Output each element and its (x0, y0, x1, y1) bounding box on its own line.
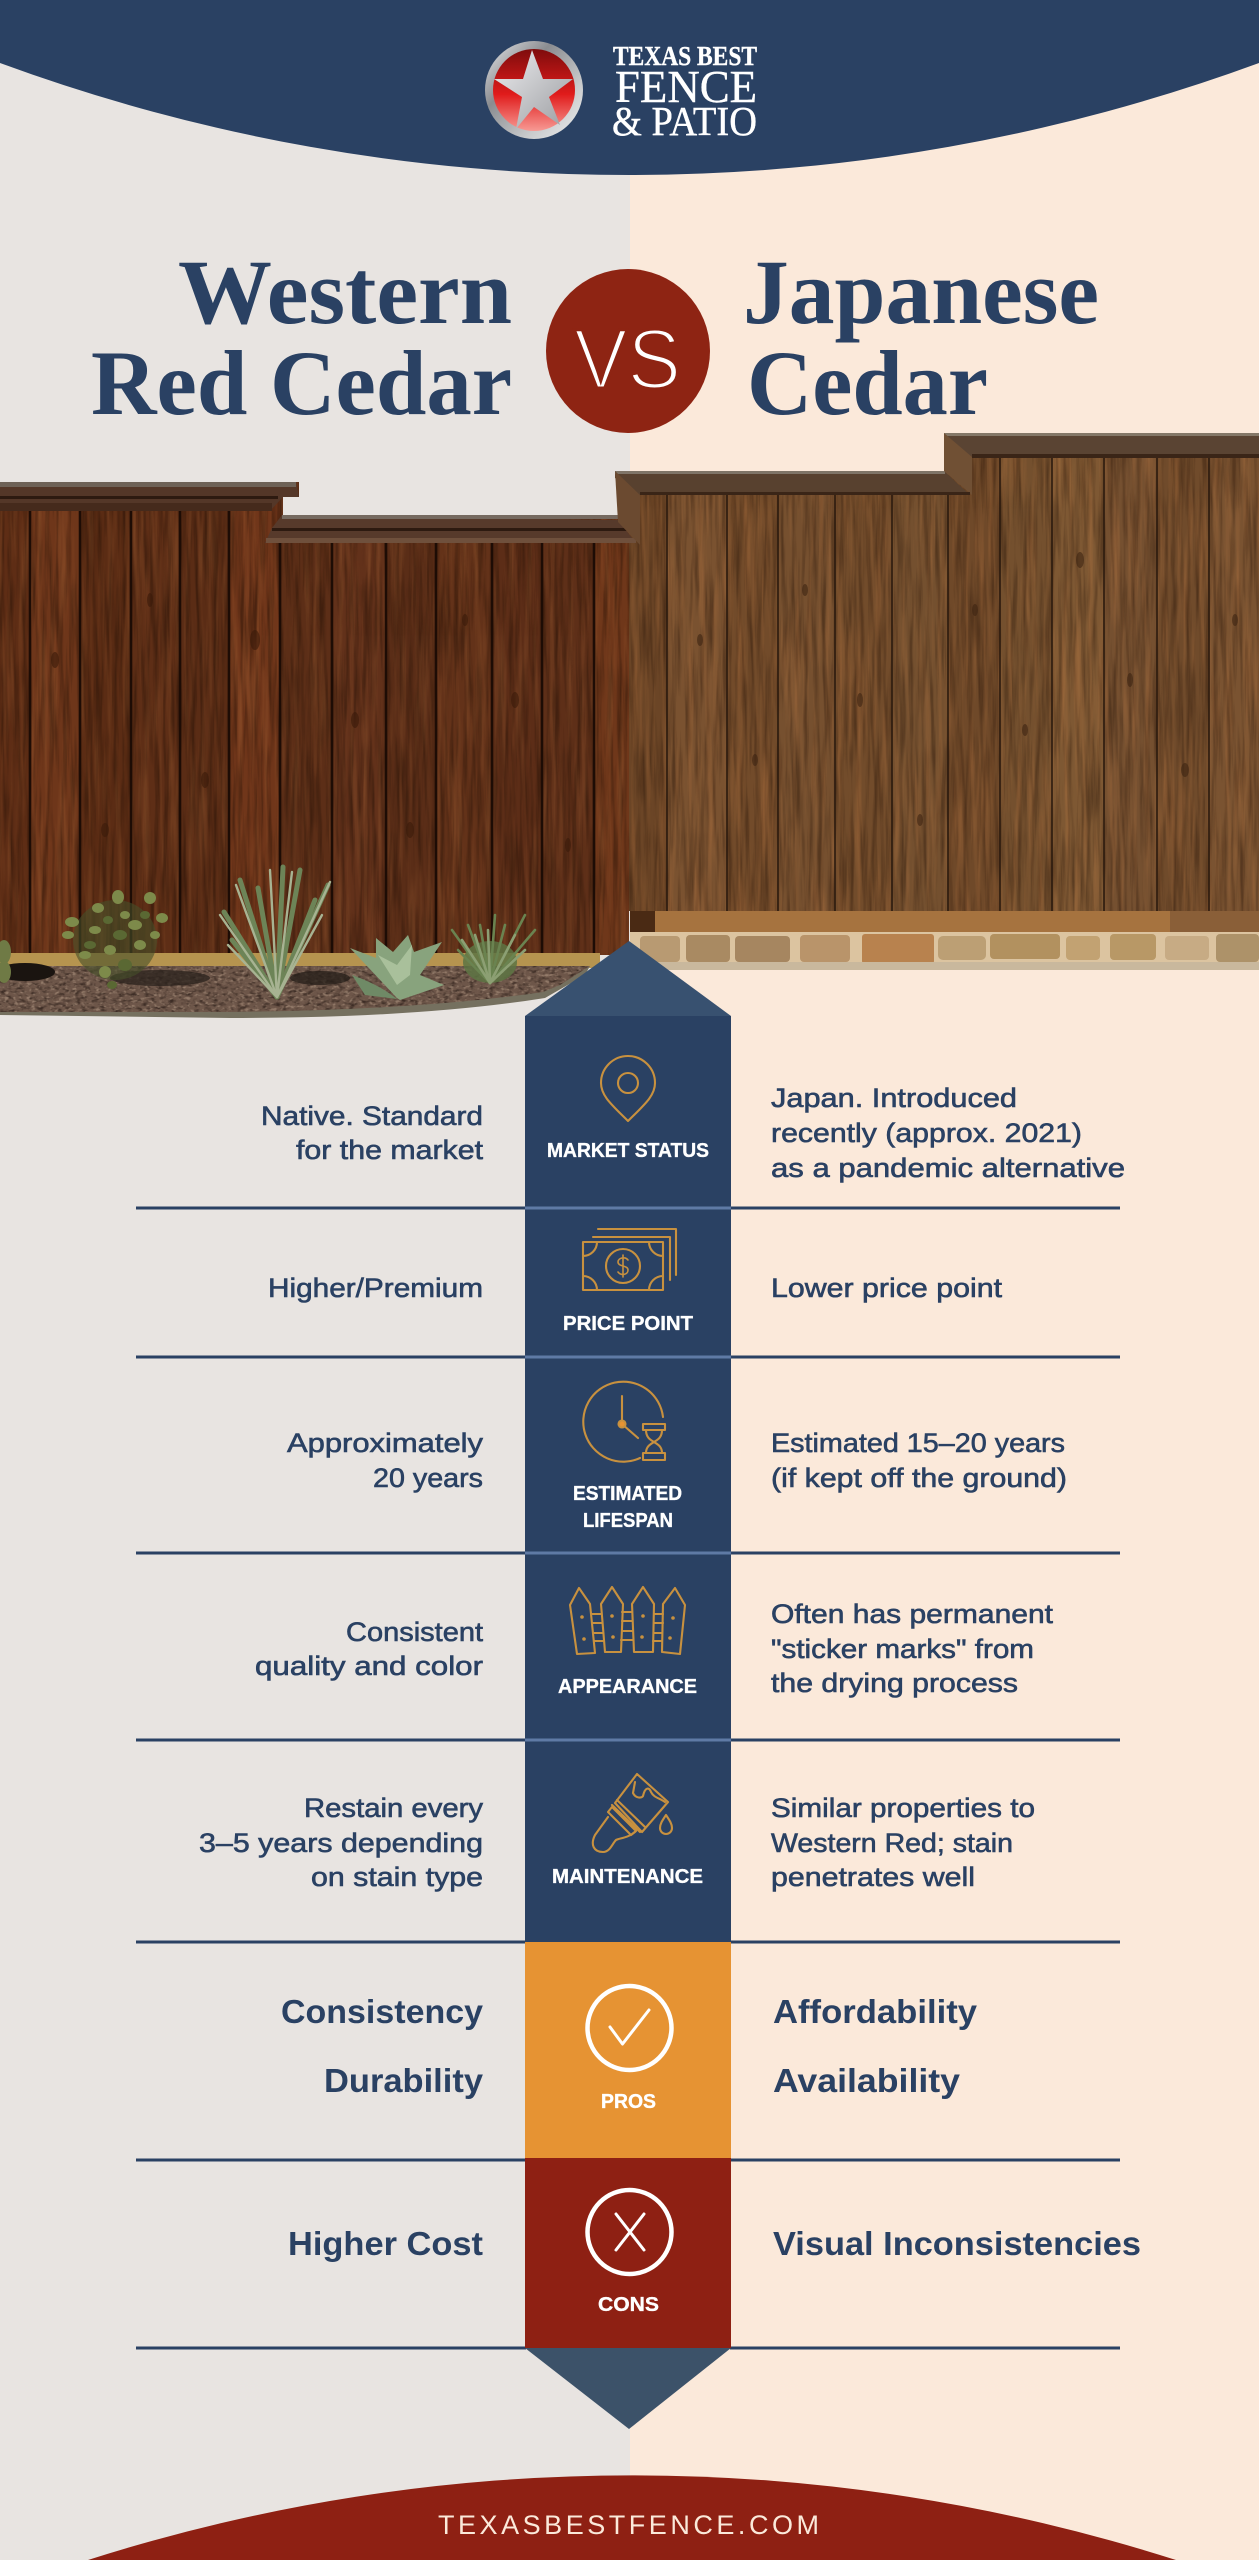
knots (697, 552, 1238, 826)
title: Japanese Cedar: Japanese (743, 241, 1099, 343)
right fence base board and stone wall (630, 911, 1259, 970)
icon: map pin (601, 1056, 655, 1121)
plant: agave (350, 935, 444, 1000)
text: market status, Japanese: as a pandemic alternative (771, 1153, 1125, 1183)
background: right panel (630, 0, 1259, 2560)
title: Western Red Cedar (91, 241, 512, 434)
text: market status, Japanese (771, 1083, 1125, 1183)
left fence: darker stained cedar (0, 480, 630, 960)
text: appearance, Japanese: Often has permanent (771, 1599, 1054, 1629)
text: appearance, Western Red (255, 1617, 484, 1681)
cons: Japanese: Visual Inconsistencies (773, 2225, 1141, 2262)
text: maintenance, Western Red: Restain every (304, 1793, 484, 1823)
bottom arrow (525, 2348, 731, 2429)
text: lifespan, Western Red: 20 years (373, 1463, 483, 1493)
text: market status, Japanese: recently (approx. 2021) (771, 1118, 1082, 1148)
category: maintenance (552, 1774, 703, 1888)
text: maintenance, Japanese: Western Red; stain (771, 1828, 1013, 1858)
text: market status, Western Red (261, 1101, 484, 1165)
text: appearance, Western Red: quality and color (255, 1651, 483, 1681)
text: maintenance, Japanese: penetrates well (771, 1862, 975, 1892)
text: maintenance, Japanese (771, 1793, 1035, 1892)
cons block: CONS (598, 2294, 659, 2316)
right fence: lighter natural cedar (629, 430, 1259, 915)
background: left panel (0, 0, 630, 2560)
pros block (525, 1942, 731, 2160)
pros: Western Red: Durability (324, 2062, 484, 2099)
cons: Western Red: Higher Cost (288, 2225, 483, 2262)
plant: leafy bush (62, 890, 168, 989)
category: market status: MARKET STATUS (547, 1140, 709, 1162)
category: maintenance: MAINTENANCE (552, 1866, 703, 1888)
category: estimated lifespan: LIFESPAN (583, 1510, 673, 1532)
category: appearance: APPEARANCE (558, 1676, 697, 1698)
text: appearance, Western Red: Consistent (346, 1617, 484, 1647)
text: maintenance, Western Red: on stain type (311, 1862, 483, 1892)
icon: banknotes (583, 1229, 676, 1290)
title: Western Red Cedar: Red Cedar (91, 332, 512, 434)
title: Western Red Cedar: Western (178, 241, 512, 343)
category: estimated lifespan: ESTIMATED (573, 1483, 682, 1505)
icon: x circle (588, 2190, 672, 2274)
category: price point (563, 1229, 693, 1335)
cons block (525, 2158, 731, 2348)
center column (525, 1016, 731, 1942)
logo (485, 41, 757, 144)
text: maintenance, Western Red: 3–5 years depending (199, 1828, 483, 1858)
title: Japanese Cedar: Cedar (747, 332, 988, 434)
fence caps (0, 433, 1259, 545)
plant: yucca (220, 867, 330, 997)
row dividers (136, 1206, 1120, 2350)
text: price, Western Red: Higher/Premium (268, 1273, 483, 1303)
mulch bed (0, 960, 600, 1020)
text: maintenance, Western Red (199, 1793, 484, 1892)
text: lifespan, Japanese: (if kept off the ground) (771, 1463, 1067, 1493)
fence photo illustration (0, 430, 1259, 1020)
icon: star badge (485, 41, 583, 139)
logo wordmark: FENCE (615, 61, 757, 112)
text: lifespan, Western Red (287, 1428, 484, 1493)
plant: grass clump (452, 915, 535, 983)
VS badge: VS (574, 312, 681, 406)
header arc (0, 0, 1259, 175)
text: market status, Japanese: Japan. Introduced (771, 1083, 1017, 1113)
text: lifespan, Japanese: Estimated 15–20 years (771, 1428, 1065, 1458)
footer url: TEXASBESTFENCE.COM (438, 2510, 819, 2540)
text: appearance, Japanese: "sticker marks" from (771, 1634, 1034, 1664)
icon: paint brush (593, 1774, 672, 1852)
title: Japanese Cedar (743, 241, 1099, 434)
knots (51, 593, 571, 852)
top arrow (525, 941, 731, 1016)
VS badge (546, 269, 710, 433)
text: maintenance, Japanese: Similar properties to (771, 1793, 1035, 1823)
text: lifespan, Western Red: Approximately (287, 1428, 484, 1458)
logo wordmark: TEXAS BEST (613, 41, 757, 71)
pros: Japanese: Availability (773, 2062, 961, 2099)
category: appearance (558, 1587, 697, 1698)
category: market status (547, 1056, 709, 1162)
category: price point: PRICE POINT (563, 1313, 693, 1335)
footer arc (88, 2475, 1176, 2560)
pros: Western Red (281, 1993, 484, 2099)
logo wordmark: & PATIO (612, 98, 757, 144)
pros: Western Red: Consistency (281, 1993, 484, 2030)
text: appearance, Japanese (771, 1599, 1054, 1698)
pros: Japanese (773, 1993, 978, 2099)
pros: Japanese: Affordability (773, 1993, 978, 2030)
left base board (0, 953, 600, 968)
icon: clock and hourglass (583, 1382, 665, 1462)
plant: small shrub at left edge (0, 940, 11, 983)
text: market status, Western Red: for the market (296, 1135, 484, 1165)
icon: check circle (588, 1986, 672, 2070)
category: estimated lifespan (573, 1382, 682, 1532)
pros block: PROS (601, 2091, 656, 2113)
text: price, Japanese: Lower price point (771, 1273, 1003, 1303)
icon: picket fence (570, 1587, 685, 1654)
logo wordmark (612, 41, 757, 144)
text: market status, Western Red: Native. Standard (261, 1101, 483, 1131)
text: lifespan, Japanese (771, 1428, 1067, 1493)
text: appearance, Japanese: the drying process (771, 1668, 1018, 1698)
